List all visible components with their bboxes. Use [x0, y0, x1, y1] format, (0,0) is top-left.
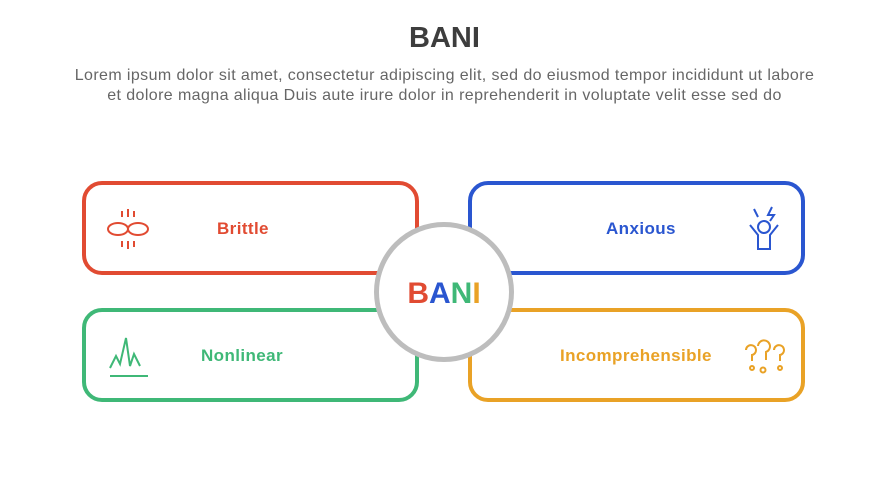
center circle — [374, 222, 514, 362]
subtitle: et dolore magna aliqua Duis aute irure dolor in reprehenderit in voluptate velit esse sed do — [107, 87, 782, 104]
center circle: BANI — [407, 277, 481, 310]
icon: spike chart — [109, 338, 148, 377]
icon: stressed person — [749, 206, 779, 250]
panel: nonlinear — [82, 308, 419, 402]
label: Nonlinear — [201, 346, 283, 365]
title: BANI — [409, 22, 480, 54]
subtitle — [75, 67, 814, 104]
panel: anxious — [468, 181, 805, 275]
label: Incomprehensible — [560, 346, 712, 365]
icon: question marks — [745, 339, 785, 374]
subtitle: Lorem ipsum dolor sit amet, consectetur adipiscing elit, sed do eiusmod tempor incididunt ut labore — [75, 67, 814, 84]
label: Anxious — [606, 219, 676, 238]
icon: broken chain — [107, 209, 149, 249]
panel: incomprehensible — [468, 308, 805, 402]
label: Brittle — [217, 219, 269, 238]
panel: brittle — [82, 181, 419, 275]
